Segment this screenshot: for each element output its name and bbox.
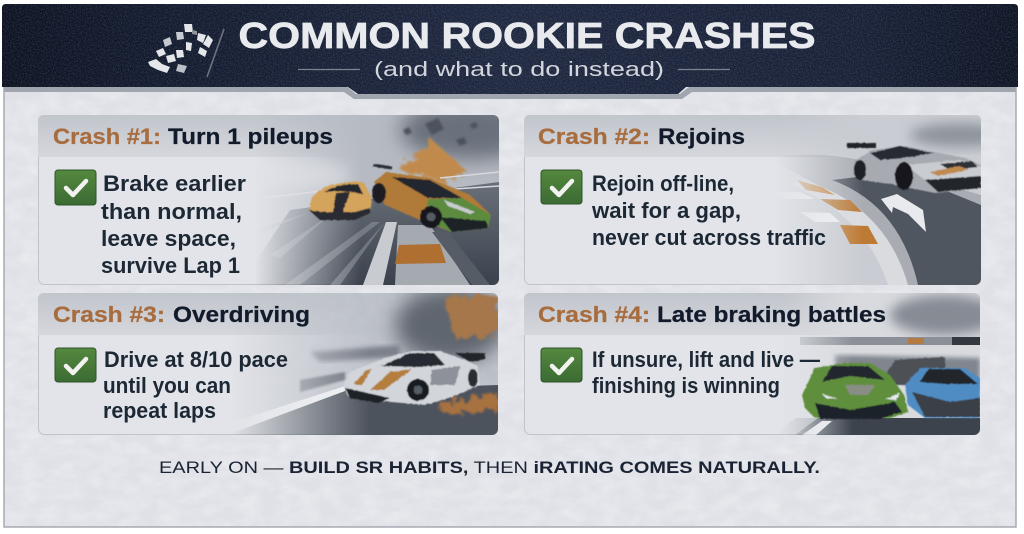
text: crash 2 advice: Rejoin off-line,: [592, 171, 734, 196]
text: crash 4 advice: If unsure, lift and live —: [592, 347, 820, 372]
title: COMMON ROOKIE CRASHES: [238, 15, 816, 56]
heading: crash 1: Turn 1 pileups: [168, 124, 333, 149]
icon: blue car: [905, 368, 980, 418]
heading: crash 2: Crash #2:: [538, 124, 650, 149]
icon: check: [55, 170, 96, 205]
text: crash 1 advice: leave space,: [101, 226, 236, 251]
icon: grey car: [885, 357, 945, 385]
text: crash 1 advice: survive Lap 1: [101, 253, 240, 278]
icon: checkered flag: [148, 24, 224, 77]
icon: orange and green car: [372, 165, 491, 232]
icon: check: [55, 348, 96, 382]
panel: crash 3: [38, 287, 505, 435]
text: crash 3 advice: Drive at 8/10 pace: [104, 347, 288, 372]
text: crash 4 advice: [592, 347, 820, 398]
text: crash 1 advice: than normal,: [101, 199, 242, 224]
text: crash 1 advice: Brake earlier: [103, 171, 246, 196]
text: crash 2 advice: never cut across traffic: [592, 225, 826, 250]
image: rejoin: [788, 115, 981, 285]
heading: crash 2: Rejoins: [658, 124, 745, 149]
arrow: rejoin path: [881, 194, 926, 232]
header banner: [2, 4, 1018, 99]
heading: crash 3: Crash #3:: [53, 302, 165, 327]
icon: green car: [802, 363, 908, 419]
text: crash 4 advice: finishing is winning: [592, 373, 780, 398]
footer takeaway: EARLY ON — BUILD SR HABITS, THEN iRATING COMES NATURALLY.: [159, 459, 820, 477]
icon: yellow car: [309, 181, 372, 220]
image: overdriving: [238, 293, 498, 435]
image: turn 1 pileup: [260, 115, 499, 285]
heading: crash 1: Crash #1:: [53, 124, 161, 149]
panel: crash 4: [524, 293, 1000, 435]
panel: crash 1: [38, 115, 499, 285]
text: crash 3 advice: [103, 347, 288, 423]
image: late braking: [788, 293, 980, 435]
icon: silver car: [847, 143, 981, 193]
subtitle: (and what to do instead): [374, 59, 664, 81]
heading: crash 4: Crash #4:: [538, 302, 650, 327]
heading: crash 3: Overdriving: [173, 302, 310, 327]
icon: silver sports car: [343, 351, 485, 405]
panel: crash 2: [524, 115, 1010, 285]
text: crash 1 advice: [101, 171, 246, 278]
heading: crash 4: Late braking battles: [657, 302, 886, 327]
text: crash 3 advice: until you can: [103, 373, 231, 398]
text: crash 2 advice: [591, 171, 826, 250]
icon: check: [541, 170, 582, 204]
text: crash 2 advice: wait for a gap,: [591, 198, 741, 223]
icon: check: [541, 348, 582, 382]
text: crash 3 advice: repeat laps: [103, 398, 216, 423]
